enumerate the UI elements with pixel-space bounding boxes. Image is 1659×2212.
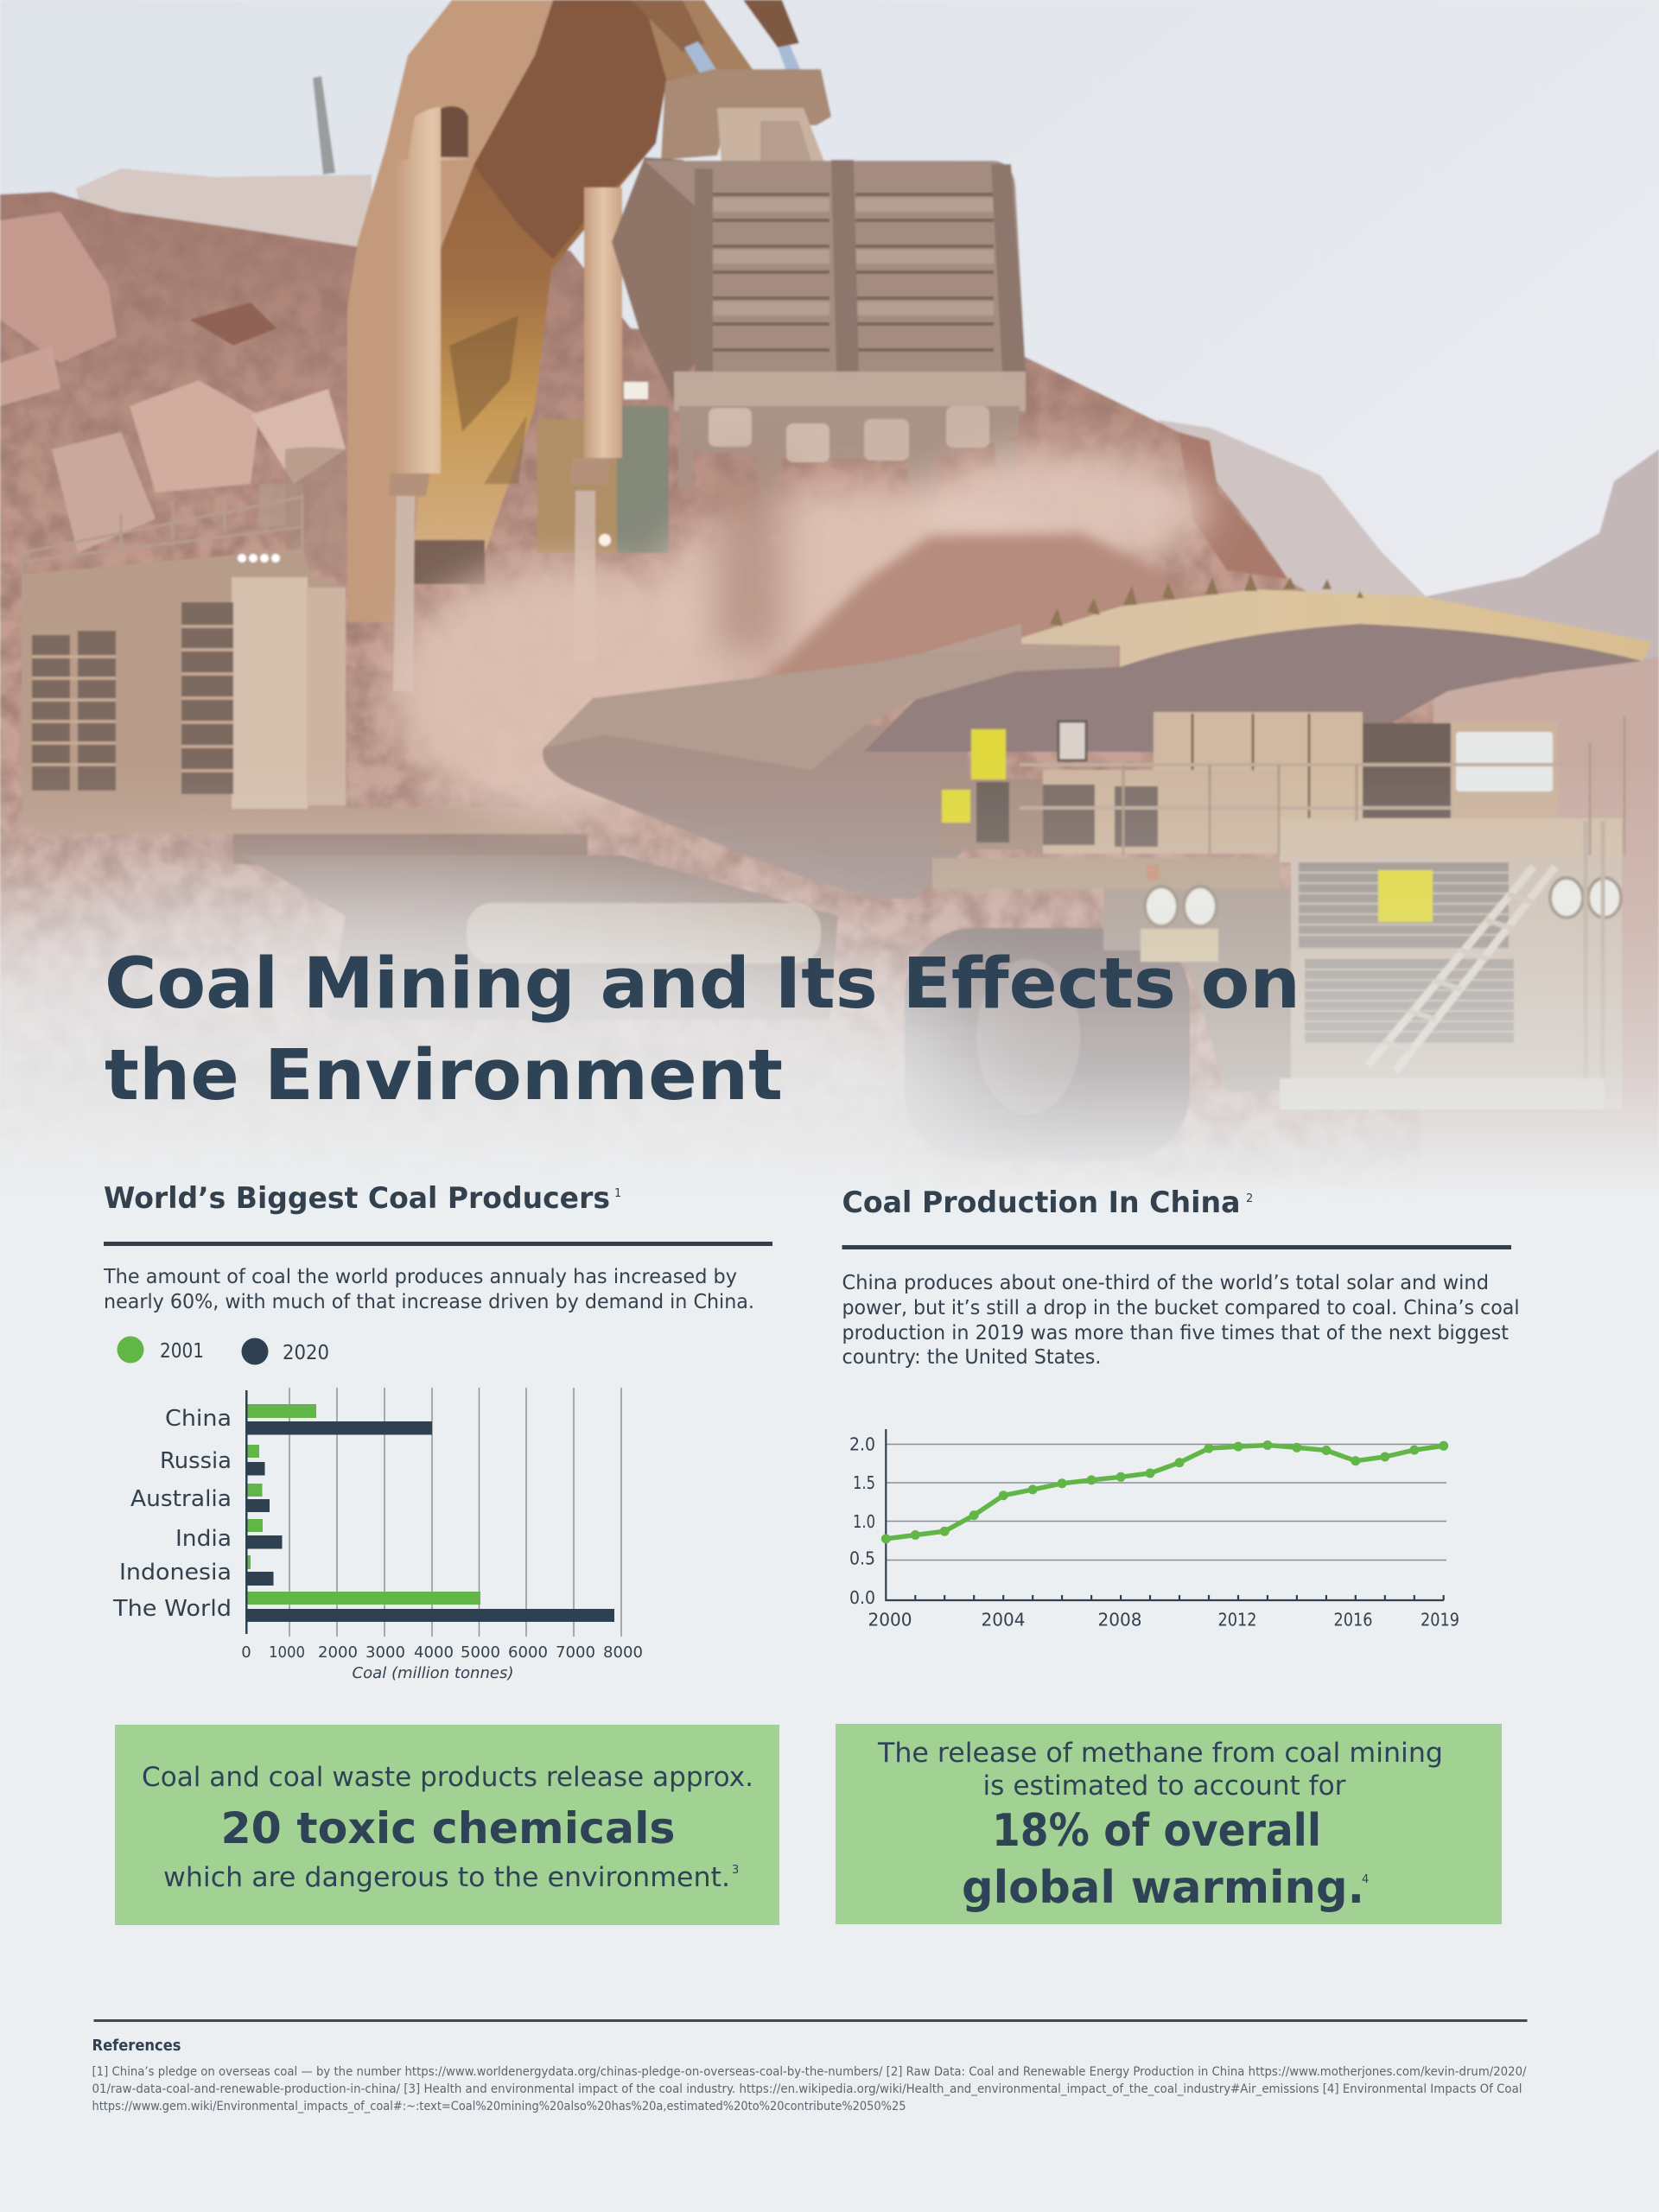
y axis labels: 2.0 [849, 1434, 875, 1455]
intro text: country: the United States. [842, 1346, 1101, 1369]
title: Coal Mining and Its Effects on [105, 944, 1300, 1025]
railings [22, 494, 302, 575]
truck superstructure [905, 712, 1624, 1161]
footnote marker 2: 2 [1246, 1192, 1253, 1205]
y axis labels: 1.5 [853, 1472, 875, 1493]
footnote marker 1: 1 [614, 1187, 621, 1200]
y axis labels: 0.5 [849, 1548, 875, 1569]
y axis labels [849, 1434, 875, 1608]
callout: global warming: global warming. [962, 1862, 1364, 1914]
x axis labels: 0 [241, 1643, 251, 1662]
lower left haze over the photo [0, 890, 985, 1287]
intro text [103, 1266, 754, 1313]
dust cloud [389, 449, 1210, 821]
bumper [1280, 1078, 1605, 1109]
x axis labels: 2012 [1218, 1609, 1256, 1630]
heading rule [104, 1242, 772, 1246]
x axis title: Coal (million tonnes) [353, 1664, 513, 1682]
country labels [112, 1406, 232, 1622]
x axis labels: 4000 [414, 1643, 454, 1662]
excavator boom [347, 0, 754, 622]
x axis labels [868, 1609, 1459, 1630]
bucket teeth [678, 406, 1020, 505]
intro text: nearly 60%, with much of that increase driven by demand in China. [104, 1291, 754, 1313]
x axis labels: 2016 [1334, 1609, 1372, 1630]
x axis labels: 2000 [318, 1643, 358, 1662]
country labels: China [165, 1406, 232, 1432]
x axis labels: 2000 [868, 1609, 912, 1630]
x axis labels: 7000 [556, 1643, 595, 1662]
callout: toxic chemicals: which are dangerous to the environment. [163, 1862, 730, 1893]
data line [886, 1445, 1444, 1539]
references heading: References [92, 2037, 181, 2055]
panel: coal production in china [842, 1185, 1519, 1630]
x axis labels: 2008 [1097, 1609, 1142, 1630]
rocky hillside [0, 190, 1541, 1179]
bucket bracket [661, 69, 831, 164]
intro text: The amount of coal the world produces annualy has increased by [103, 1266, 737, 1288]
hydraulic cylinders [389, 106, 622, 691]
callout: toxic chemicals: 20 toxic chemicals [221, 1803, 676, 1853]
callout: global warming: 4 [1362, 1873, 1369, 1886]
legend: 2020 [283, 1342, 329, 1364]
callout: global warming: is estimated to account for [983, 1770, 1346, 1802]
heading rule [842, 1245, 1511, 1249]
stick cylinder rods [631, 0, 802, 76]
x axis labels: 6000 [508, 1643, 548, 1662]
x axis labels: 8000 [603, 1643, 643, 1662]
line chart [849, 1429, 1459, 1630]
x axis labels: 1000 [269, 1643, 305, 1662]
yellow placards [942, 729, 1433, 922]
country labels: The World [112, 1596, 232, 1622]
radiator vents [32, 602, 233, 794]
dump truck bed [543, 574, 1652, 899]
intro text: power, but it’s still a drop in the bucket compared to coal. China’s coal [842, 1297, 1519, 1319]
axes with ticks [886, 1429, 1444, 1600]
legend: 2001 [160, 1340, 204, 1363]
heading: World’s Biggest Coal Producers [104, 1181, 610, 1216]
dirt pile [752, 533, 1210, 691]
references section [92, 2019, 1528, 2113]
sky [0, 0, 1211, 422]
bar chart [112, 1388, 643, 1682]
data points [881, 1440, 1448, 1543]
country labels: Indonesia [119, 1560, 232, 1586]
far right ground under canopy [1431, 657, 1659, 1127]
callout: toxic chemicals [115, 1725, 779, 1925]
radiator grille [1299, 862, 1514, 1043]
callout: toxic chemicals: Coal and coal waste products release approx. [142, 1762, 753, 1793]
headlights [1145, 878, 1621, 926]
distant mountains [76, 76, 1659, 743]
x axis labels: 2004 [982, 1609, 1025, 1630]
x axis labels: 2019 [1421, 1609, 1459, 1630]
callout: toxic chemicals: 3 [732, 1864, 739, 1877]
country labels: India [175, 1526, 232, 1552]
country labels: Australia [130, 1486, 232, 1512]
x axis labels: 3000 [365, 1643, 405, 1662]
intro text: China produces about one-third of the world’s total solar and wind [842, 1272, 1489, 1294]
heading: Coal Production In China [842, 1185, 1241, 1220]
excavator rear body [22, 448, 588, 864]
truck canopy [925, 589, 1652, 667]
bars 2020 [246, 1421, 614, 1622]
bars 2001 [246, 1404, 480, 1605]
callout: global warming: 18% of overall [992, 1805, 1321, 1857]
excavator tracks [242, 855, 838, 1020]
hero photo illustration: excavator loading a mining truck [0, 0, 1659, 1287]
ladder [1368, 867, 1555, 1071]
references text: https://www.gem.wiki/Environmental_impacts_of_coal#:~:text=Coal%20mining%20also%20has%20a,estimated%20to%20contribute%2050%25 [92, 2100, 906, 2113]
references text: 01/raw-data-coal-and-renewable-production-in-china/ [3] Health and environmental impact of the coal industry. https://en.wikipedia.org/wiki/Health_and_environmental_impact_of_the_coal_industry#Air_emissions [4] Environmental Impacts Of Coal [92, 2082, 1522, 2096]
intro text: production in 2019 was more than five times that of the next biggest [842, 1322, 1509, 1344]
underside of canopy [864, 624, 1643, 752]
title: the Environment [105, 1035, 783, 1116]
y axis labels: 0.0 [849, 1587, 875, 1608]
truck tyre [905, 928, 1190, 1161]
excavator bucket [612, 157, 1026, 505]
y axis [245, 1390, 247, 1634]
references text: [1] China’s pledge on overseas coal — by the number https://www.worldenergydata.org/chinas-pledge-on-overseas-coal-by-the-numbers/ [2] Raw Data: Coal and Renewable Energy Production in China https://www.motherjones.com/kevin-drum/2020/ [92, 2065, 1527, 2079]
title [105, 944, 1300, 1116]
country labels: Russia [160, 1448, 232, 1474]
truck chassis [1103, 889, 1291, 1091]
x axis labels [241, 1643, 643, 1662]
panel: world's biggest coal producers [103, 1181, 772, 1682]
intro text [842, 1272, 1519, 1369]
callout: global warming: The release of methane from coal mining [877, 1738, 1443, 1769]
legend [118, 1336, 329, 1365]
y axis labels: 1.0 [853, 1511, 875, 1532]
excavator cab behind boom [537, 380, 670, 554]
truck front frame [1291, 858, 1622, 1109]
references text [92, 2065, 1527, 2113]
callout: global warming [836, 1724, 1502, 1924]
x axis labels: 5000 [461, 1643, 500, 1662]
